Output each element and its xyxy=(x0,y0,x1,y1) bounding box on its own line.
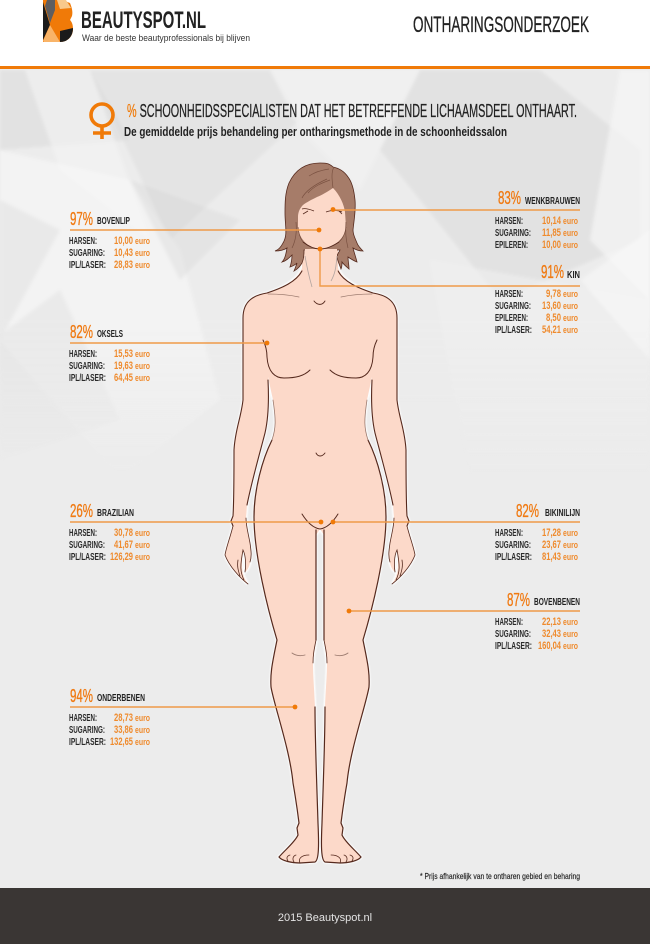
callout: onderbenen: 33,86 xyxy=(114,724,133,736)
callout: onderbenen: euro xyxy=(135,737,150,748)
callout: bovenbenen: euro xyxy=(563,617,578,628)
callout: wenkbrauwen: euro xyxy=(563,228,578,239)
callout: wenkbrauwen: EPILEREN: xyxy=(495,240,528,251)
callout: brazilian: HARSEN: xyxy=(69,528,97,539)
callout: bovenbenen: 160,04 xyxy=(538,640,562,652)
callout: kin: IPL/LASER: xyxy=(495,325,532,336)
callout: wenkbrauwen xyxy=(331,188,580,251)
callout: oksels: SUGARING: xyxy=(69,361,105,372)
callout: brazilian: IPL/LASER: xyxy=(69,552,106,563)
callout: onderbenen: HARSEN: xyxy=(69,713,97,724)
header band xyxy=(0,0,650,66)
callout: oksels: 15,53 xyxy=(114,348,133,360)
callout: brazilian: euro xyxy=(135,528,150,539)
callout: kin: euro xyxy=(563,313,578,324)
callout: bikinilijn: SUGARING: xyxy=(495,540,531,551)
callout: bovenbenen: IPL/LASER: xyxy=(495,641,532,652)
callout: bovenbenen xyxy=(347,590,580,652)
callout: wenkbrauwen: HARSEN: xyxy=(495,216,523,227)
callout: bikinilijn: 82% xyxy=(516,501,539,521)
callout: onderbenen: 132,65 xyxy=(110,736,133,748)
face and neck xyxy=(298,188,346,249)
callout: oksels: IPL/LASER: xyxy=(69,373,106,384)
callout: kin: 13,60 xyxy=(542,300,561,312)
callout: kin: 8,50 xyxy=(546,312,561,324)
callout: bikinilijn: IPL/LASER: xyxy=(495,552,532,563)
body fill xyxy=(225,240,415,863)
callout: brazilian: 30,78 xyxy=(114,527,133,539)
callout: kin: HARSEN: xyxy=(495,289,523,300)
eyes xyxy=(302,209,342,214)
tagline: Waar de beste beautyprofessionals bij blijven xyxy=(82,33,250,44)
callout: wenkbrauwen: WENKBRAUWEN xyxy=(525,195,580,207)
callout: onderbenen: euro xyxy=(135,713,150,724)
callout: brazilian: 41,67 xyxy=(114,539,133,551)
callout: kin: 91% xyxy=(541,262,564,282)
callout: bovenlip: euro xyxy=(135,248,150,259)
callout: oksels: HARSEN: xyxy=(69,349,97,360)
female body figure xyxy=(225,163,415,863)
callout: bovenlip: euro xyxy=(135,236,150,247)
callout: bikinilijn xyxy=(331,501,580,563)
callout: onderbenen: 28,73 xyxy=(114,712,133,724)
callout: bovenbenen: HARSEN: xyxy=(495,617,523,628)
callout: kin: euro xyxy=(563,301,578,312)
callout: bovenlip: IPL/LASER: xyxy=(69,260,106,271)
callout: brazilian: euro xyxy=(135,540,150,551)
callout: wenkbrauwen: euro xyxy=(563,216,578,227)
callout: wenkbrauwen: SUGARING: xyxy=(495,228,531,239)
callout: bikinilijn: euro xyxy=(563,540,578,551)
copyright: 2015 Beautyspot.nl xyxy=(278,912,372,924)
callout: onderbenen: 94% xyxy=(70,686,93,706)
orange rule xyxy=(0,66,650,69)
icon: female symbol xyxy=(91,104,113,139)
callout: onderbenen: SUGARING: xyxy=(69,725,105,736)
callout: onderbenen: IPL/LASER: xyxy=(69,737,106,748)
callout: bovenbenen: euro xyxy=(563,629,578,640)
callout: oksels: euro xyxy=(135,373,150,384)
callout: bikinilijn: HARSEN: xyxy=(495,528,523,539)
callout: bovenlip: 10,00 xyxy=(114,235,133,247)
callout: bovenbenen: 22,13 xyxy=(542,616,561,628)
callout: kin: KIN xyxy=(567,269,580,281)
callout: kin: 54,21 xyxy=(542,324,561,336)
callout: brazilian: BRAZILIAN xyxy=(97,507,134,519)
callout: wenkbrauwen: 11,85 xyxy=(542,227,561,239)
callout: bikinilijn: BIKINILIJN xyxy=(545,507,580,519)
callout: oksels: 82% xyxy=(70,322,93,342)
callout: oksels: 19,63 xyxy=(114,360,133,372)
callout: wenkbrauwen: 10,14 xyxy=(542,215,562,227)
callout: bikinilijn: euro xyxy=(563,528,578,539)
callout: bovenbenen: BOVENBENEN xyxy=(534,596,580,608)
brand name: BEAUTYSPOT.NL xyxy=(81,7,206,34)
callout: bovenlip: euro xyxy=(135,260,150,271)
callout: bovenlip: 10,43 xyxy=(114,247,133,259)
callout: onderbenen: euro xyxy=(135,725,150,736)
hair xyxy=(275,163,363,271)
neck shadows xyxy=(305,256,337,287)
callout: bovenlip: SUGARING: xyxy=(69,248,105,259)
callout: wenkbrauwen: 83% xyxy=(498,188,521,208)
footnote: * Prijs afhankelijk van te ontharen gebied en beharing xyxy=(420,871,580,881)
callout: brazilian: euro xyxy=(135,552,150,563)
callout: bovenbenen: euro xyxy=(563,641,578,652)
callout: oksels: euro xyxy=(135,349,150,360)
callout: bovenlip: 97% xyxy=(70,209,93,229)
callout: bikinilijn: 23,67 xyxy=(542,539,561,551)
callout: kin: euro xyxy=(563,325,578,336)
callout: bikinilijn: 17,28 xyxy=(542,527,561,539)
callout: bovenlip: BOVENLIP xyxy=(97,215,130,227)
callout: kin: 9,78 xyxy=(546,288,561,300)
callout: brazilian: 126,29 xyxy=(110,551,133,563)
legend subheading: De gemiddelde prijs behandeling per ontharingsmethode in de schoonheidssalon xyxy=(124,124,507,139)
callout: bikinilijn: euro xyxy=(563,552,578,563)
callout: bovenlip: 28,83 xyxy=(114,259,133,271)
callout: oksels xyxy=(69,322,269,384)
callout: oksels: 64,45 xyxy=(114,372,133,384)
callout: bovenlip: HARSEN: xyxy=(69,236,97,247)
callout: onderbenen xyxy=(69,686,297,748)
callout: bikinilijn: 81,43 xyxy=(542,551,561,563)
callout: brazilian xyxy=(69,501,323,563)
footer xyxy=(0,888,650,944)
body outlines xyxy=(225,271,415,863)
callout: bovenbenen: 87% xyxy=(507,590,530,610)
callout: bovenlip xyxy=(69,209,321,271)
callout: bovenbenen: 32,43 xyxy=(542,628,561,640)
callout: wenkbrauwen: euro xyxy=(563,240,578,251)
white halo xyxy=(225,240,415,863)
callout: bovenbenen: SUGARING: xyxy=(495,629,531,640)
callout: onderbenen: ONDERBENEN xyxy=(97,692,145,704)
callout: kin: euro xyxy=(563,289,578,300)
callout: brazilian: 26% xyxy=(70,501,93,521)
logo xyxy=(43,0,250,44)
callout: oksels: euro xyxy=(135,361,150,372)
callout: oksels: OKSELS xyxy=(97,328,123,340)
callout: kin: SUGARING: xyxy=(495,301,531,312)
callout: kin: EPILEREN: xyxy=(495,313,528,324)
callout: kin xyxy=(318,247,580,336)
hair strands xyxy=(292,167,348,248)
callout: brazilian: SUGARING: xyxy=(69,540,105,551)
callout: wenkbrauwen: 10,00 xyxy=(542,239,561,251)
